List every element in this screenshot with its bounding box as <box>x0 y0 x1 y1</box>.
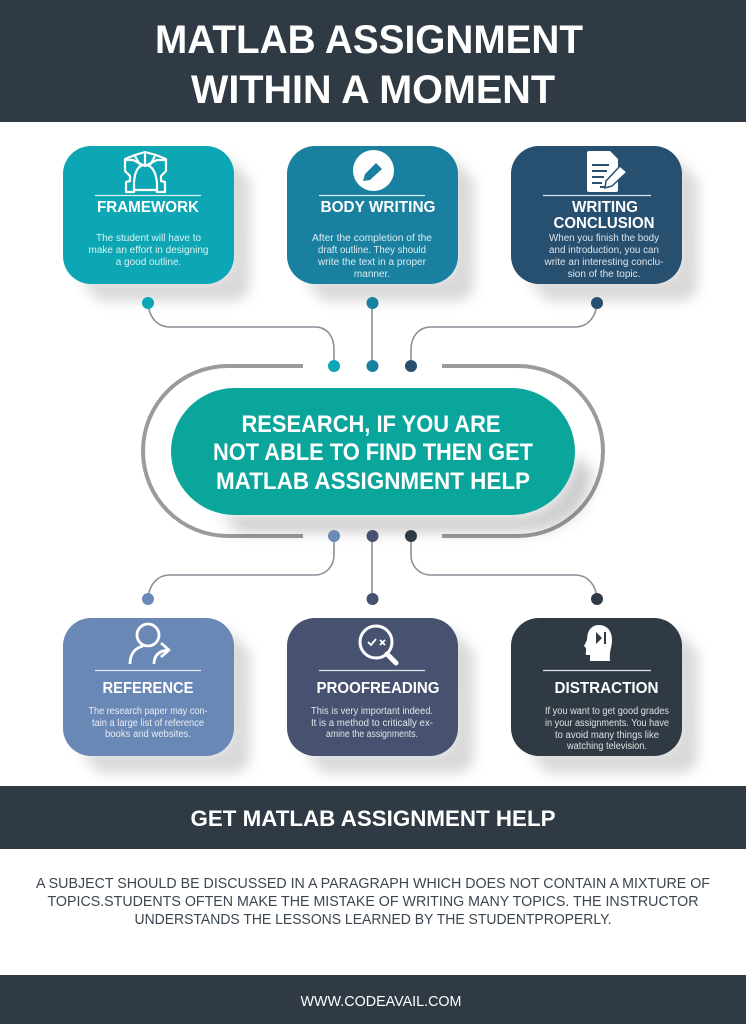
footer url: WWW.CODEAVAIL.COM <box>300 993 462 1010</box>
panel: distraction: DISTRACTION <box>554 680 658 697</box>
center pill text: MATLAB ASSIGNMENT HELP <box>216 468 530 495</box>
text: proofreading description: It is a method to critically ex- <box>311 718 433 729</box>
panel: distraction <box>511 618 682 756</box>
text: distraction description: in your assignments. You have <box>545 718 669 729</box>
paragraph: A SUBJECT SHOULD BE DISCUSSED IN A PARAGRAPH WHICH DOES NOT CONTAIN A MIXTURE OF <box>36 876 710 892</box>
text: body writing description: manner. <box>354 269 390 280</box>
icon: person with arrow <box>130 624 169 664</box>
connector lines: bottom <box>142 530 603 605</box>
text: distraction description: If you want to get good grades <box>545 706 669 717</box>
text: conclusion description <box>543 233 664 280</box>
text: distraction description <box>545 706 669 752</box>
text: reference description: tain a large list of reference <box>92 718 204 729</box>
icon: document with pen <box>587 151 627 192</box>
icon: head silhouette <box>584 625 612 661</box>
text: reference description <box>88 706 208 740</box>
section band <box>0 786 746 849</box>
panel: body writing: BODY WRITING <box>320 199 436 216</box>
center outline bracket <box>143 366 603 536</box>
text: body writing description: After the completion of the <box>312 233 432 244</box>
text: conclusion description: sion of the topic. <box>568 269 640 280</box>
text: framework description: The student will have to <box>96 233 201 244</box>
text: body writing description: draft outline. They should <box>318 245 426 256</box>
text: proofreading description: This is very important indeed. <box>311 706 433 717</box>
text: framework description: a good outline. <box>116 257 181 268</box>
text: body writing description <box>312 233 432 280</box>
panel: reference <box>63 618 234 756</box>
center pill <box>171 388 575 515</box>
panel: framework: FRAMEWORK <box>97 199 200 216</box>
footer band <box>0 975 746 1024</box>
text: conclusion description: write an interesting conclu- <box>543 257 664 268</box>
center pill text: RESEARCH, IF YOU ARE <box>242 411 500 438</box>
text: proofreading description <box>311 706 433 740</box>
paragraph <box>36 876 710 928</box>
text: reference description: books and websites. <box>105 729 191 740</box>
text: proofreading description: amine the assignments. <box>326 729 418 740</box>
dots: top <box>142 297 603 372</box>
title <box>155 18 583 112</box>
dots: bottom <box>142 530 603 605</box>
panel: writing conclusion <box>511 146 682 284</box>
icon: framework arch <box>125 152 166 192</box>
center pill text: NOT ABLE TO FIND THEN GET <box>213 439 533 466</box>
panel: proofreading: PROOFREADING <box>316 680 440 697</box>
panel: writing conclusion: CONCLUSION <box>554 215 654 232</box>
icon: magnifier with marks <box>360 626 396 663</box>
panel: framework <box>63 146 234 284</box>
text: conclusion description: When you finish the body <box>549 233 659 244</box>
paragraph: UNDERSTANDS THE LESSONS LEARNED BY THE STUDENTPROPERLY. <box>134 912 612 928</box>
center pill shadow <box>220 455 592 532</box>
text: reference description: The research paper may con- <box>88 706 208 717</box>
panel: proofreading <box>287 618 458 756</box>
center pill text <box>213 411 533 495</box>
section heading: GET MATLAB ASSIGNMENT HELP <box>190 806 556 831</box>
title: WITHIN A MOMENT <box>191 68 555 112</box>
paragraph: TOPICS.STUDENTS OFTEN MAKE THE MISTAKE OF WRITING MANY TOPICS. THE INSTRUCTOR <box>48 894 698 910</box>
title: MATLAB ASSIGNMENT <box>155 18 583 62</box>
panel: reference: REFERENCE <box>102 680 194 697</box>
text: conclusion description: and introduction, you can <box>549 245 659 256</box>
panel: body writing <box>287 146 458 284</box>
text: distraction description: watching television. <box>566 741 647 752</box>
text: framework description: make an effort in designing <box>88 245 208 256</box>
text: distraction description: to avoid many things like <box>555 730 659 741</box>
header band <box>0 0 746 122</box>
icon: pencil in circle <box>353 150 394 191</box>
panel: writing conclusion: WRITING <box>572 199 638 216</box>
connector lines: top <box>142 297 603 372</box>
text: framework description <box>88 233 208 268</box>
card shadows <box>78 155 698 773</box>
text: body writing description: write the text in a proper <box>317 257 427 268</box>
